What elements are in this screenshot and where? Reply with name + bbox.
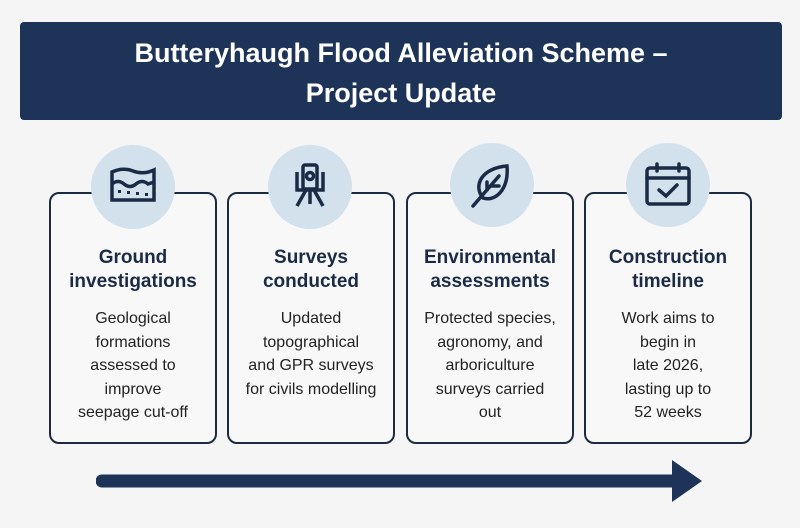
panel: construction timeline: timeline: [632, 271, 704, 292]
icon: ground layers: [91, 145, 175, 229]
panel: ground investigations: Ground: [99, 247, 167, 268]
title: [20, 22, 782, 120]
panel: surveys: conducted: [263, 271, 359, 292]
panel: environmental: surveys carried: [436, 380, 544, 398]
title: Butteryhaugh Flood Alleviation Scheme –: [134, 38, 668, 68]
panel: surveys: and GPR surveys: [248, 357, 374, 374]
panel: environmental: Environmental: [424, 247, 556, 268]
panel: surveys: [227, 192, 395, 444]
panel: construction timeline: [584, 192, 752, 444]
panel: surveys: for civils modelling: [246, 380, 376, 398]
panel: construction timeline: 52 weeks: [634, 404, 702, 421]
panel: ground investigations: formations: [96, 334, 170, 350]
panel: environmental: Protected species,: [424, 310, 556, 327]
panel: environmental: agronomy, and: [437, 334, 543, 350]
panel: ground investigations: [49, 192, 217, 444]
panel: surveys: Updated: [281, 310, 341, 327]
arrow: timeline: [96, 460, 702, 502]
panel: environmental: assessments: [430, 271, 550, 292]
panel: environmental: arboriculture: [446, 357, 534, 374]
panel: environmental: out: [479, 404, 501, 421]
title: Project Update: [306, 78, 496, 108]
panel: ground investigations: investigations: [69, 271, 197, 292]
icon: leaf: [450, 143, 534, 227]
icon: survey instrument: [268, 145, 352, 229]
icon: calendar: [626, 143, 710, 227]
panel: construction timeline: lasting up to: [625, 380, 711, 398]
panel: surveys: topographical: [263, 334, 359, 350]
panel: environmental: [406, 192, 574, 444]
panel: construction timeline: late 2026,: [633, 357, 703, 374]
panel: ground investigations: seepage cut-off: [78, 404, 188, 421]
panel: ground investigations: Geological: [95, 310, 171, 327]
panel: construction timeline: Work aims to: [621, 310, 715, 327]
panel: construction timeline: Construction: [609, 247, 727, 268]
panel: ground investigations: improve: [105, 380, 161, 398]
panel: ground investigations: assessed to: [90, 357, 176, 374]
panel: construction timeline: begin in: [640, 334, 696, 350]
panel: surveys: Surveys: [274, 247, 348, 268]
